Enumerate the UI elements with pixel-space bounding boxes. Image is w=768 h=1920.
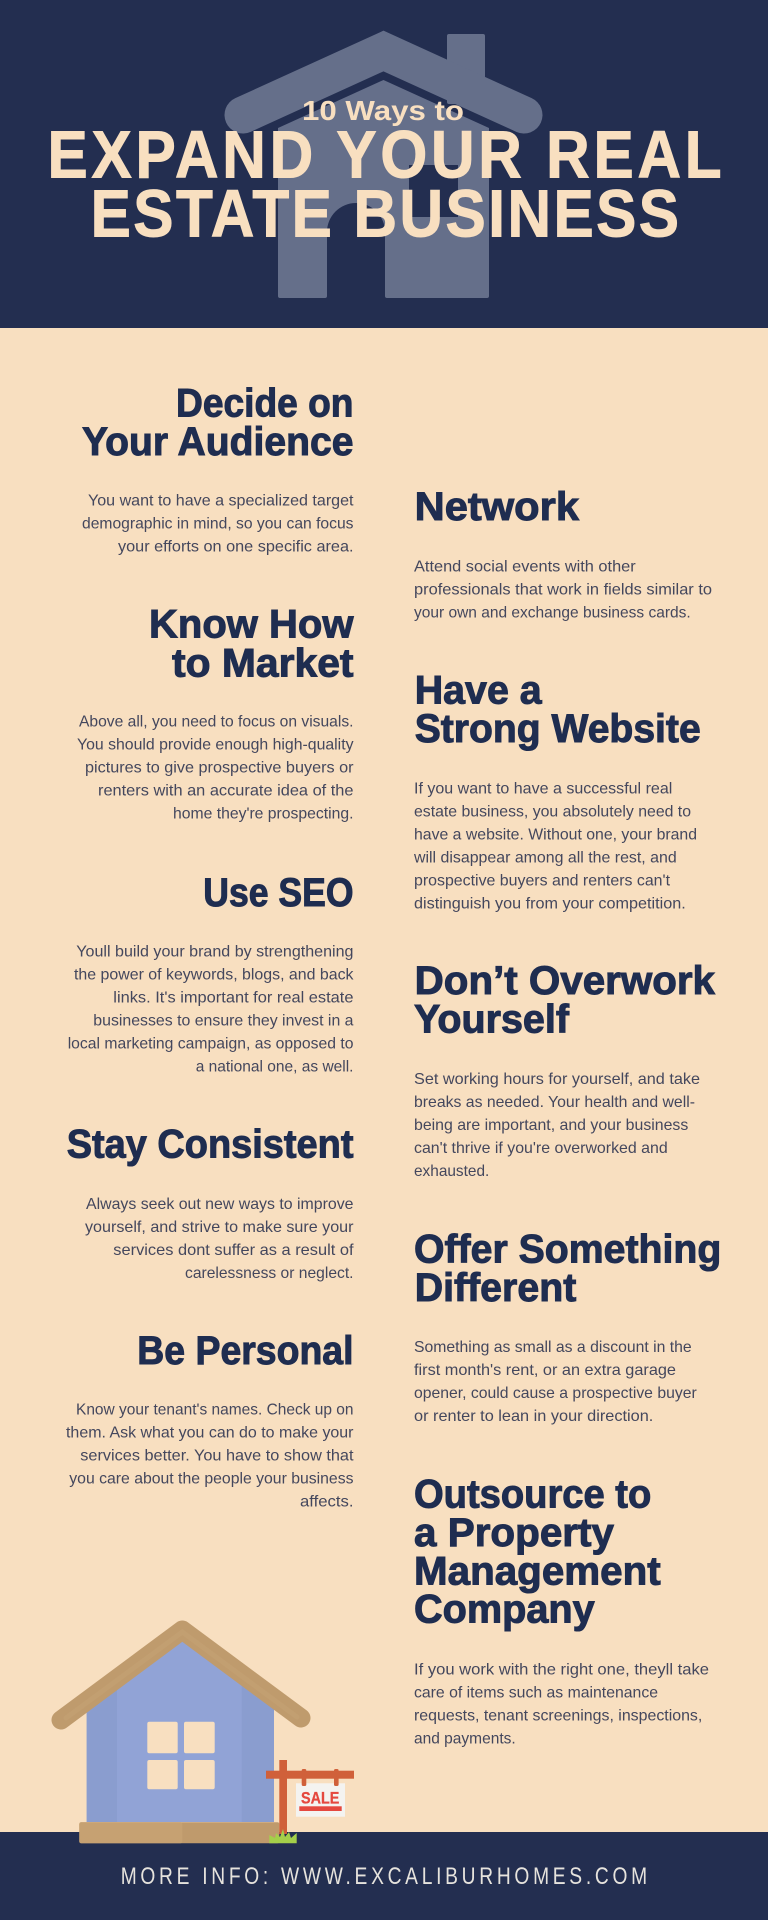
- text block: pictures to give prospective buyers or: [85, 760, 354, 777]
- text block: professionals that work in fields similar to: [414, 582, 712, 599]
- text block: links. It's important for real estate: [113, 990, 354, 1007]
- heading: Have a: [415, 668, 542, 712]
- heading: Company: [414, 1588, 595, 1632]
- text block: [68, 944, 354, 1076]
- text block: them. Ask what you can do to make your: [66, 1424, 354, 1441]
- text block: care of items such as maintenance: [414, 1685, 658, 1702]
- heading: Different: [415, 1266, 576, 1310]
- title: Expand Your Real Estate Business: ESTATE BUSINESS: [91, 176, 679, 251]
- panel: Offer Something Different: [414, 1227, 721, 1425]
- text block: breaks as needed. Your health and well-: [414, 1094, 695, 1111]
- text block: Attend social events with other: [414, 559, 636, 576]
- text block: prospective buyers and renters can't: [414, 872, 671, 889]
- panel: Stay Consistent: [67, 1122, 354, 1282]
- text block: the power of keywords, blogs, and back: [74, 967, 354, 984]
- text block: Set working hours for yourself, and take: [414, 1071, 700, 1088]
- text block: estate business, you absolutely need to: [414, 803, 691, 820]
- panel: Have a Strong Website: [413, 668, 701, 912]
- text block: [414, 559, 712, 622]
- text block: exhausted.: [414, 1163, 489, 1180]
- text block: first month's rent, or an extra garage: [414, 1362, 676, 1379]
- text block: businesses to ensure they invest in a: [93, 1013, 354, 1030]
- text block: You should provide enough high-quality: [77, 737, 354, 754]
- panel: Network: [414, 485, 712, 622]
- heading: Outsource to: [414, 1473, 651, 1517]
- title: 10 Ways to: 10 Ways to: [302, 95, 464, 126]
- text block: a national one, as well.: [196, 1059, 354, 1076]
- text block: renters with an accurate idea of the: [98, 783, 354, 800]
- icon: house silhouette: [243, 34, 524, 298]
- text block: Know your tenant's names. Check up on: [76, 1401, 354, 1418]
- heading: Be Personal: [137, 1329, 354, 1373]
- text block: If you want to have a successful real: [414, 780, 672, 797]
- panel: Decide on Your Audience: [82, 382, 354, 555]
- text block: opener, could cause a prospective buyer: [414, 1385, 697, 1402]
- text block: services dont suffer as a result of: [113, 1242, 354, 1259]
- text block: affects.: [300, 1493, 354, 1510]
- heading: [149, 603, 354, 686]
- text block: You want to have a specialized target: [88, 492, 354, 509]
- heading: Yourself: [414, 997, 570, 1041]
- panel: Use SEO: [68, 871, 354, 1076]
- text block: you care about the people your business: [69, 1470, 354, 1487]
- text block: or renter to lean in your direction.: [414, 1408, 653, 1425]
- title: Expand Your Real Estate Business: [48, 117, 722, 251]
- heading: Stay Consistent: [67, 1122, 353, 1166]
- text block: your own and exchange business cards.: [414, 605, 691, 622]
- heading: Offer Something: [414, 1227, 721, 1271]
- heading: Strong Website: [415, 707, 701, 751]
- sale sign: [266, 1760, 354, 1834]
- text block: [414, 1071, 700, 1180]
- panel: Don't Overwork Yourself: [414, 959, 716, 1180]
- grass: [269, 1829, 297, 1843]
- text block: carelessness or neglect.: [185, 1265, 354, 1282]
- title: Expand Your Real Estate Business: EXPAND YOUR REAL: [48, 117, 722, 192]
- heading: to Market: [172, 642, 354, 686]
- text block: will disappear among all the rest, and: [413, 849, 677, 866]
- text block: Youll build your brand by strengthening: [76, 944, 354, 961]
- window: [147, 1722, 215, 1789]
- heading: [82, 382, 354, 464]
- text block: your efforts on one specific area.: [118, 538, 354, 555]
- text block: and payments.: [414, 1731, 516, 1748]
- text block: [77, 714, 354, 823]
- footer link text: MORE INFO: WWW.EXCALIBURHOMES.COM: [121, 1862, 647, 1890]
- text block: services better. You have to show that: [80, 1447, 354, 1464]
- heading: Use SEO: [203, 871, 354, 915]
- text block: can't thrive if you're overworked and: [414, 1140, 668, 1157]
- panel: Be Personal: [66, 1329, 354, 1510]
- text block: Something as small as a discount in the: [414, 1339, 692, 1356]
- heading: [414, 1473, 661, 1632]
- house body: [87, 1639, 274, 1822]
- text block: Always seek out new ways to improve: [86, 1196, 354, 1213]
- text block: being are important, and your business: [414, 1117, 688, 1134]
- text block: distinguish you from your competition.: [414, 895, 686, 912]
- text block: [414, 1662, 709, 1748]
- text block: [413, 780, 697, 912]
- text block: requests, tenant screenings, inspections,: [414, 1708, 702, 1725]
- text block: [414, 1339, 697, 1425]
- roof: [61, 1630, 301, 1720]
- panel: footer: [0, 1832, 768, 1920]
- heading: [414, 959, 716, 1041]
- heading: a Property: [414, 1511, 615, 1555]
- heading: Decide on: [176, 382, 354, 426]
- text block: If you work with the right one, theyll take: [414, 1662, 709, 1679]
- heading: Your Audience: [82, 420, 354, 464]
- heading: Management: [414, 1549, 661, 1593]
- text block: yourself, and strive to make sure your: [85, 1219, 354, 1236]
- panel: header banner: [0, 0, 768, 328]
- panel: Outsource to a Property Management Company: [414, 1473, 709, 1748]
- text block: [66, 1401, 354, 1510]
- text block: Above all, you need to focus on visuals.: [79, 714, 354, 731]
- heading: Don’t Overwork: [415, 959, 716, 1003]
- panel: Know How to Market: [77, 603, 354, 823]
- text block: local marketing campaign, as opposed to: [68, 1036, 354, 1053]
- heading: Network: [415, 485, 580, 529]
- text block: home they're prospecting.: [173, 806, 354, 823]
- heading: Know How: [149, 603, 354, 647]
- heading: [414, 1227, 721, 1310]
- text block: have a website. Without one, your brand: [414, 826, 697, 843]
- icon: house illustration with sale sign: [61, 1630, 354, 1843]
- sale sign: SALE: [301, 1789, 339, 1807]
- heading: [415, 668, 701, 751]
- text block: [85, 1196, 354, 1282]
- porch: [79, 1822, 279, 1843]
- text block: demographic in mind, so you can focus: [82, 515, 354, 532]
- text block: [82, 492, 354, 555]
